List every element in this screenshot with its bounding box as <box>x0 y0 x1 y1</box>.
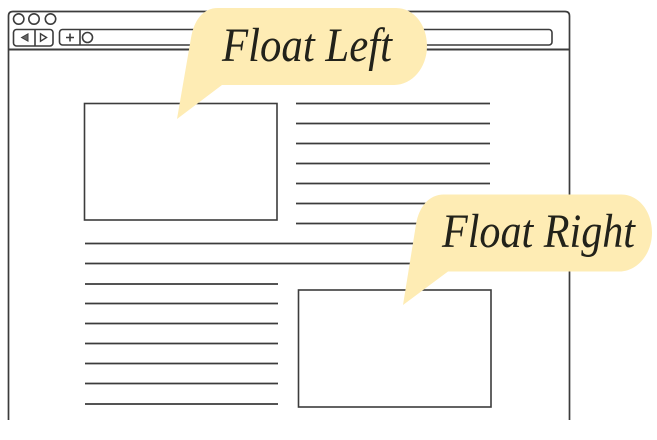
browser window frame <box>8 12 570 420</box>
text lines: left of bottom image <box>85 284 278 404</box>
image placeholder: bottom right <box>298 290 491 407</box>
browser window controls <box>14 14 56 24</box>
callout: Float Right: Float Right <box>441 205 636 258</box>
callout: Float Left: Float Left <box>221 19 393 72</box>
address bar <box>60 30 552 45</box>
callout: Float Left <box>177 8 427 119</box>
image placeholder: top left <box>84 104 277 220</box>
callout: Float Right <box>403 194 652 305</box>
back and forward buttons <box>14 30 53 46</box>
text lines: right of top image <box>296 104 490 224</box>
text lines: full width <box>85 244 490 264</box>
